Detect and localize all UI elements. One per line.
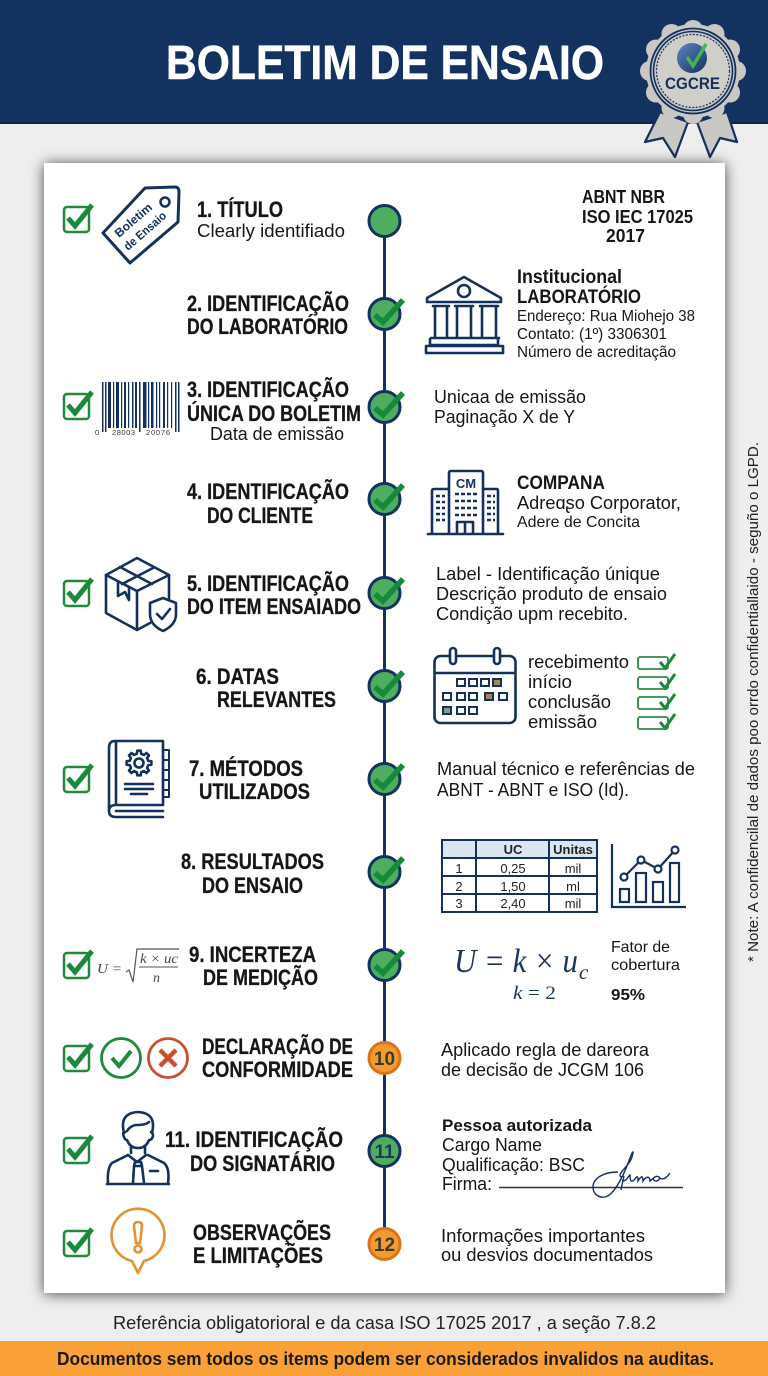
results table: Unitas — [553, 842, 593, 857]
small formula: U = — [97, 962, 122, 977]
date list: início — [528, 671, 572, 692]
results table: 1 — [455, 861, 463, 876]
text: LABORATÓRIO — [517, 286, 641, 308]
results table: 3 — [455, 896, 463, 911]
text — [434, 386, 586, 427]
coverage text — [611, 939, 680, 1004]
standard reference: ABNT NBR — [582, 186, 665, 207]
timeline line — [383, 221, 386, 1244]
formula: U = k × u — [454, 943, 578, 980]
heading: 9. INCERTEZA — [189, 942, 316, 967]
checkbox — [64, 951, 92, 978]
heading: 5. IDENTIFICAÇÃO — [187, 571, 349, 596]
heading: UTILIZADOS — [199, 779, 310, 804]
node — [369, 856, 403, 888]
small formula: n — [153, 971, 160, 986]
checkbox — [64, 1229, 92, 1256]
text: Paginação X de Y — [434, 406, 575, 427]
text — [437, 758, 695, 800]
checkbox — [64, 392, 92, 419]
text: Label - Identificação únique — [436, 563, 660, 584]
formula — [454, 943, 589, 1004]
standard reference: 2017 — [606, 225, 645, 246]
row 7: métodos — [64, 741, 695, 817]
text — [517, 473, 681, 531]
text: Adreɑʂo Corporator, — [517, 492, 681, 513]
heading: DECLARAÇÃO DE — [202, 1034, 353, 1059]
text: Pessoa autorizada — [442, 1116, 593, 1135]
icon: rejected — [148, 1038, 188, 1078]
heading — [165, 1127, 343, 1176]
results table: mil — [565, 896, 581, 911]
row 1: título — [64, 186, 693, 263]
checkbox — [64, 1136, 92, 1163]
heading — [193, 1220, 331, 1268]
node — [369, 578, 403, 608]
text: Adere de Concita — [517, 514, 640, 531]
text: Clearly identifiado — [197, 220, 345, 241]
row 12: observações — [64, 1209, 653, 1273]
text: COMPANA — [517, 473, 605, 494]
text: Descrição produto de ensaio — [436, 583, 667, 604]
checkbox — [64, 1044, 92, 1071]
text: ABNT - ABNT e ISO (Id). — [437, 779, 629, 800]
formula: c — [579, 960, 589, 984]
text: Endereço: Rua Miohejo 38 — [517, 308, 695, 325]
heading — [187, 291, 349, 339]
heading: DO SIGNATÁRIO — [190, 1151, 335, 1176]
row 8: resultados — [181, 840, 686, 912]
heading: 3. IDENTIFICAÇÃO — [187, 377, 349, 402]
standard reference — [582, 186, 693, 246]
formula: k = 2 — [513, 983, 556, 1004]
icon: person — [107, 1112, 169, 1184]
coverage text: cobertura — [611, 957, 680, 974]
icon: institution — [426, 277, 503, 353]
icon: barcode — [95, 382, 180, 437]
heading — [187, 479, 349, 528]
results table: mil — [565, 861, 581, 876]
node: 12 — [374, 1235, 395, 1256]
icon: approved — [102, 1038, 140, 1078]
row 11: signatário — [64, 1112, 683, 1197]
coverage text: 95% — [611, 987, 645, 1004]
heading: 1. TÍTULO — [197, 197, 283, 222]
heading: DO ENSAIO — [202, 873, 303, 898]
icon: barcode: 0 — [95, 428, 99, 437]
node — [369, 1136, 400, 1166]
heading: CONFORMIDADE — [202, 1057, 353, 1082]
icon: office building: CM — [456, 476, 476, 491]
heading: 11. IDENTIFICAÇÃO — [165, 1127, 343, 1152]
heading: DE MEDIÇÃO — [203, 965, 318, 990]
icon: tag: de Ensaio — [121, 209, 169, 253]
text — [517, 267, 695, 361]
heading: DO ITEM ENSAIADO — [187, 594, 361, 619]
text: Condição upm recebito. — [436, 603, 628, 624]
text: Aplicado regla de dareora — [441, 1039, 650, 1060]
coverage text: Fator de — [611, 939, 670, 956]
icon: tag — [103, 187, 179, 263]
signature — [499, 1152, 683, 1197]
icon: calendar — [434, 648, 516, 723]
small formula — [97, 949, 179, 986]
checkbox — [64, 765, 92, 792]
text: Firma: — [442, 1173, 492, 1194]
node — [369, 950, 403, 980]
checkbox — [64, 579, 92, 606]
node — [369, 206, 400, 236]
heading — [187, 571, 361, 619]
results table: 2,40 — [500, 896, 526, 911]
date list: emissão — [528, 711, 597, 732]
text: ou desvios documentados — [441, 1244, 653, 1265]
row 6: datas — [196, 648, 675, 732]
results table: UC — [504, 842, 523, 857]
row 10: conformidade — [64, 1034, 650, 1082]
text: Número de acreditação — [517, 344, 676, 361]
node — [369, 1042, 400, 1074]
heading — [202, 1034, 353, 1082]
row 4: cliente — [187, 471, 681, 534]
date list — [528, 651, 629, 732]
panel: card — [44, 163, 725, 1293]
footer warning bar: Documentos sem todos os items podem ser considerados invalidos na auditas. — [57, 1349, 714, 1369]
heading — [189, 756, 310, 804]
heading — [196, 664, 336, 712]
row 2: laboratório — [187, 267, 695, 361]
text — [436, 563, 667, 624]
icon: barcode: 28003 — [112, 428, 135, 437]
date list: conclusão — [528, 691, 611, 712]
side note: * Note: A confidencilal de dados poo orrdo confidentiallaido - seguño o LGPD. — [746, 442, 762, 962]
heading — [187, 377, 361, 444]
badge: CGCRE seal: CGCRE — [665, 74, 720, 93]
chart icon — [612, 844, 686, 907]
icon: box with shield — [106, 558, 176, 631]
small formula: k × uc — [140, 952, 179, 967]
heading: DO LABORATÓRIO — [187, 314, 348, 339]
text — [441, 1225, 653, 1265]
heading: RELEVANTES — [217, 687, 336, 712]
heading: 8. RESULTADOS — [181, 849, 324, 874]
node — [369, 1228, 400, 1260]
node: 11 — [374, 1142, 395, 1163]
results table: 1,50 — [500, 879, 526, 894]
heading: 6. DATAS — [196, 664, 279, 689]
text: de decisão de JCGM 106 — [441, 1059, 644, 1080]
heading: 7. MÉTODOS — [189, 756, 303, 781]
icon: tag: Boletim — [112, 200, 155, 240]
row 3: boletim — [64, 377, 586, 444]
standard reference: ISO IEC 17025 — [582, 206, 693, 227]
date checkboxes — [638, 654, 675, 729]
text: Institucional — [517, 267, 622, 288]
icon: alert bubble — [112, 1209, 164, 1273]
results table — [442, 840, 597, 912]
title: BOLETIM DE ENSAIO — [166, 37, 604, 90]
text: Informações importantes — [441, 1225, 645, 1246]
icon: barcode: 20076 — [146, 428, 170, 437]
heading: DO CLIENTE — [207, 503, 313, 528]
text: Cargo Name — [442, 1134, 542, 1155]
footer warning bar — [0, 1341, 768, 1376]
date list: recebimento — [528, 651, 629, 672]
results table: ml — [566, 879, 580, 894]
node — [369, 484, 403, 514]
footer reference: Referência obligatorioral e da casa ISO 17025 2017 , a seção 7.8.2 — [113, 1312, 656, 1333]
node — [369, 670, 403, 702]
text: Qualificação: BSC — [442, 1154, 585, 1175]
results table: 2 — [455, 879, 463, 894]
heading — [181, 849, 324, 898]
heading — [189, 942, 318, 990]
heading: Data de emissão — [210, 423, 344, 444]
heading: OBSERVAÇÕES — [193, 1220, 331, 1245]
results table: 0,25 — [500, 861, 526, 876]
node: 10 — [374, 1049, 395, 1070]
row 9: incerteza — [64, 939, 680, 1004]
text: Unicaa de emissão — [434, 386, 586, 407]
node — [369, 392, 403, 422]
text — [441, 1039, 650, 1080]
heading: ÚNICA DO BOLETIM — [187, 401, 361, 426]
checkbox — [64, 205, 92, 232]
heading: E LIMITAÇÕES — [193, 1243, 323, 1268]
node — [369, 298, 403, 330]
icon: office building — [428, 471, 503, 534]
row 5: item — [64, 558, 667, 631]
badge: CGCRE seal — [640, 20, 746, 157]
icon: manual book — [109, 741, 169, 817]
text — [442, 1116, 593, 1194]
heading: 2. IDENTIFICAÇÃO — [187, 291, 349, 316]
text: Manual técnico e referências de — [437, 758, 695, 779]
text: Contato: (1º) 3306301 — [517, 326, 667, 343]
heading: 4. IDENTIFICAÇÃO — [187, 479, 349, 504]
node — [369, 764, 403, 794]
header banner — [0, 0, 768, 124]
